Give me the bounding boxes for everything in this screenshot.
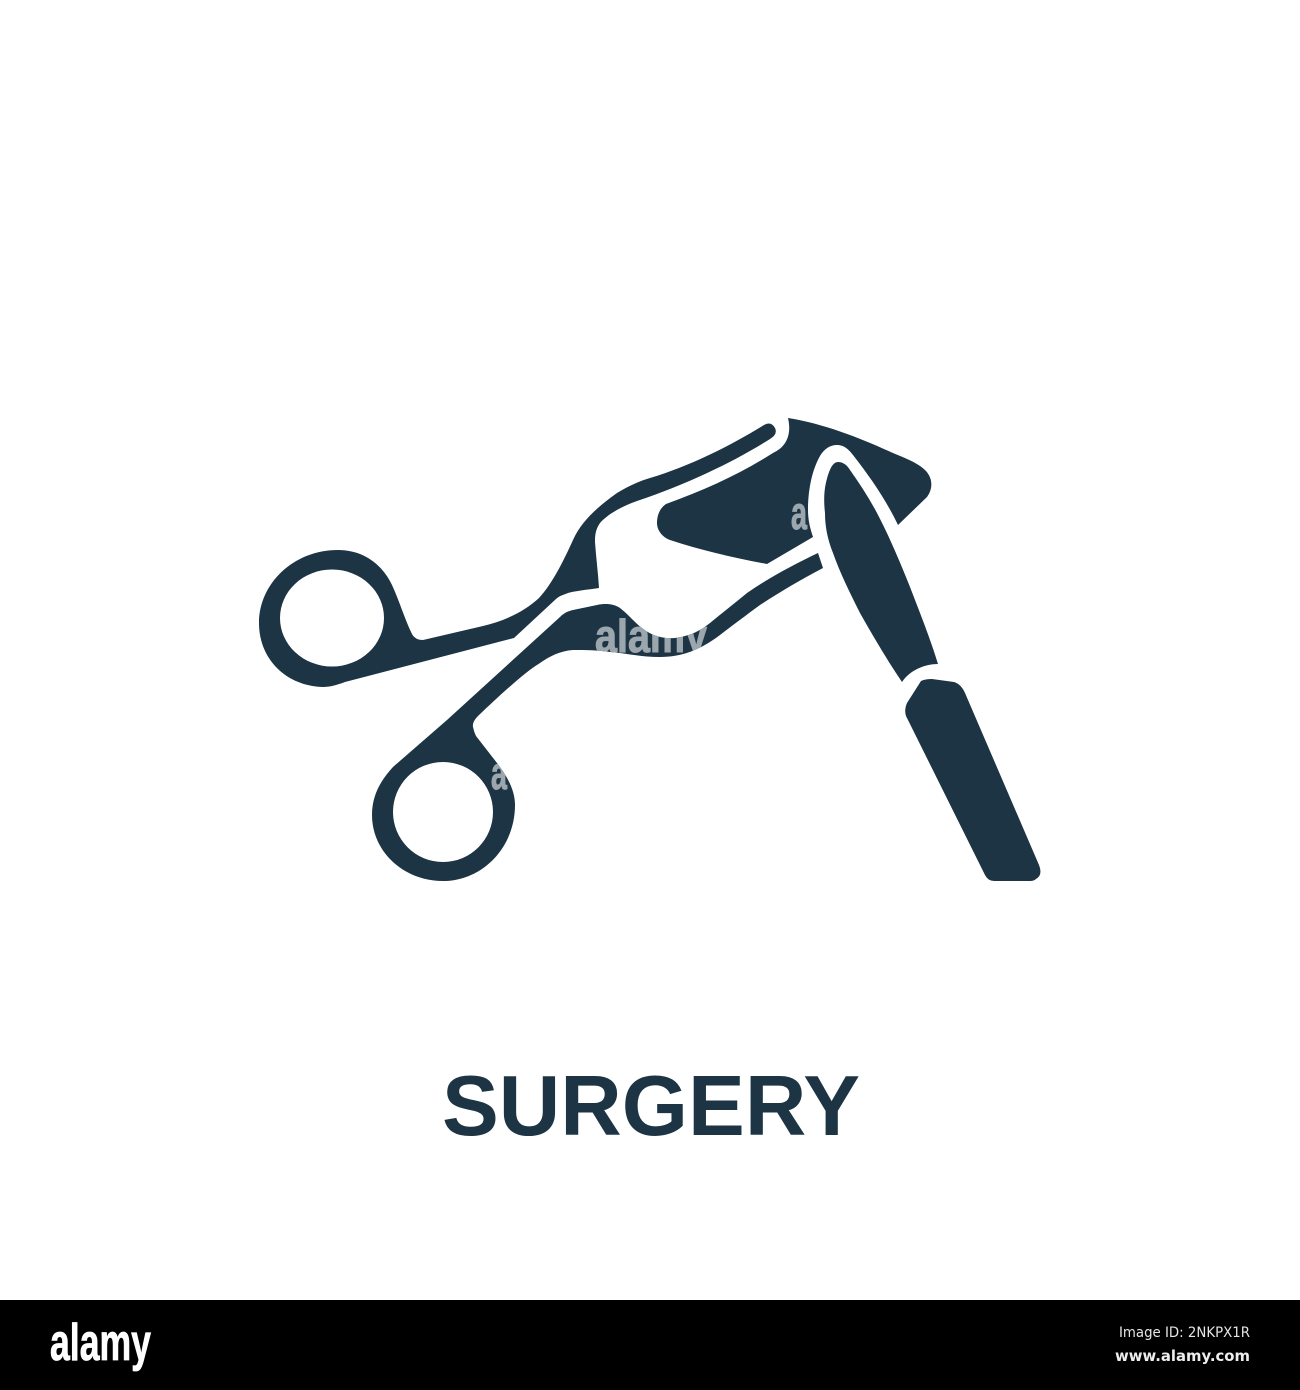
infographic canvas	[0, 418, 1300, 1390]
title: SURGERY: SURGERY	[442, 1059, 860, 1154]
icon: scissors	[259, 424, 823, 881]
scalpel blade	[824, 462, 938, 682]
watermark letter on ring: a	[491, 747, 507, 799]
footer logo: alamy	[50, 1314, 151, 1372]
icon: surgery tools	[259, 418, 1040, 881]
icon: scalpel	[824, 462, 1040, 881]
lower scissor arm with finger ring	[372, 553, 823, 881]
watermark fragments on icon	[491, 487, 807, 799]
footer image id: Image ID: 2NKPX1R	[1119, 1325, 1250, 1341]
footer bar	[0, 1300, 1300, 1390]
icon: incision wound shape	[657, 418, 931, 564]
footer url: www.alamy.com	[1115, 1347, 1250, 1365]
watermark letter on wound: a	[791, 487, 807, 539]
upper scissor arm with finger ring	[259, 424, 776, 687]
scalpel handle	[905, 679, 1040, 881]
watermark word on lower arm: alamy	[595, 610, 707, 662]
